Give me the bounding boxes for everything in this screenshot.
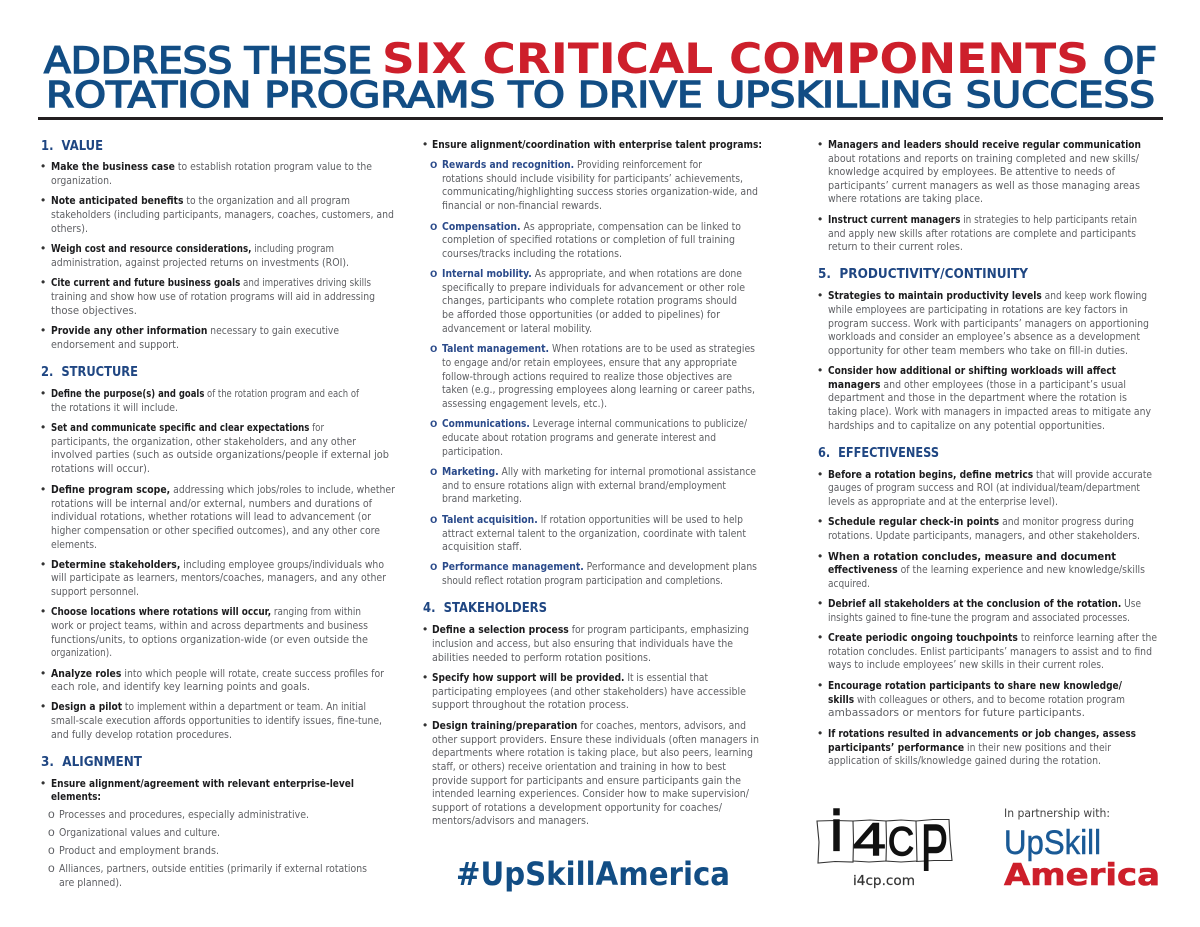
heading: effectiveness: 6. EFFECTIVENESS (818, 445, 939, 461)
item: managers and leaders: Managers and leaders should receive regular communication (828, 138, 1141, 151)
item: marketing: o (430, 464, 437, 478)
logo: i4cp (817, 799, 952, 889)
hashtag: #UpSkillAmerica (456, 855, 730, 893)
item: program scope: • (41, 482, 45, 496)
icon: sketched letter boxes (817, 820, 952, 863)
item: check-in points: Schedule regular check-in points and monitor progress during (828, 515, 1134, 528)
item: business case: organization. (51, 174, 112, 187)
item: values: Organizational values and culture. (59, 826, 220, 839)
item: support: participating employees (and other stakeholders) have accessible (432, 685, 746, 698)
item: marketing: and to ensure rotations align with external brand/employment (442, 479, 726, 492)
item: training: other support providers. Ensure these individuals (often managers in (432, 733, 759, 746)
item: talent management: assessing engagement levels, etc.). (442, 397, 607, 410)
item: business goals: Cite current and future business goals and imperatives driving skills (51, 276, 371, 289)
item: business goals: training and show how use of rotation programs will aid in addressing (51, 290, 375, 303)
item: internal mobility: Internal mobility. As appropriate, and when rotations are done (442, 267, 742, 280)
item: debrief: insights gained to fine-tune the program and associated processes. (828, 611, 1130, 624)
item: training (423, 718, 759, 827)
item: anticipated benefits: Note anticipated benefits to the organization and all program (51, 194, 350, 207)
item: advancement (818, 726, 1136, 767)
item: internal mobility: advancement or lateral mobility. (442, 322, 592, 335)
panel: 2. structure (41, 364, 395, 741)
item: marketing (430, 464, 756, 505)
item: talent management: follow-through actions required to realize those objectives are (442, 370, 732, 383)
item: communications: Communications. Leverage internal communications to publicize/ (442, 417, 747, 430)
item: business goals (41, 275, 375, 317)
item: talent acquisition: Talent acquisition. If rotation opportunities will be used to help (442, 513, 743, 526)
item: talent acquisition: o (430, 512, 437, 526)
item: define metrics: Before a rotation begins, define metrics that will provide accurate (828, 468, 1152, 481)
item: brands: Product and employment brands. (59, 844, 219, 857)
item: managers and leaders: participants’ current managers as well as those managing areas (828, 179, 1140, 192)
item: selection process: inclusion and access, but also ensuring that individuals have the (432, 637, 733, 650)
panel: 3. alignment (41, 137, 762, 889)
panel: 5. productivity/continuity (818, 266, 1152, 432)
item: share knowledge: skills with colleagues or others, and to become rotation program (828, 693, 1125, 706)
panel: 4. stakeholders (423, 137, 1141, 827)
title: ADDRESS THESE (44, 39, 372, 82)
item: talent acquisition: attract external talent to the organization, coordinate with talent (442, 527, 746, 540)
item: other information: endorsement and support. (51, 338, 179, 351)
item: talent programs: Ensure alignment/coordination with enterprise talent programs: (432, 138, 762, 151)
item: touchpoints: • (818, 630, 822, 644)
item: business case: Make the business case to establish rotation program value to the (51, 160, 372, 173)
item: enterprise-level elements: Ensure alignment/agreement with relevant enterprise-level (51, 777, 354, 790)
item: talent acquisition: acquisition staff. (442, 540, 522, 553)
item: analyze roles: each role, and identify key learning points and goals. (51, 680, 310, 693)
item: rewards: Rewards and recognition. Providing reinforcement for (442, 158, 702, 171)
item: training: intended learning experiences. Consider how to make supervision/ (432, 787, 749, 800)
item: locations: functions/units, to options organization-wide (or even outside the (51, 633, 368, 646)
item: internal mobility: changes, participants who complete rotation programs should (442, 294, 737, 307)
item: locations: organization). (51, 646, 112, 659)
item: purpose and goals: Define the purpose(s) and goals of the rotation program and each of (51, 387, 359, 400)
item: compensation: Compensation. As appropriate, compensation can be linked to (442, 220, 741, 233)
item: anticipated benefits: • (41, 193, 45, 207)
item: stakeholders (41, 557, 386, 598)
item: brands: o (48, 843, 55, 857)
item: instruct managers: return to their current roles. (828, 240, 963, 253)
item: expectations (41, 420, 389, 475)
item: productivity levels: Strategies to maintain productivity levels and keep work flowing (828, 289, 1147, 302)
item: define metrics: • (818, 467, 822, 481)
item: managers and leaders: where rotations are taking place. (828, 192, 983, 205)
item: talent management: Talent management. When rotations are to be used as strategies (442, 342, 755, 355)
item: talent programs: • (423, 137, 427, 151)
item: pilot: and fully develop rotation procedures. (51, 728, 232, 741)
item: stakeholders: support personnel. (51, 585, 139, 598)
item: program scope: individual rotations, whether rotations will lead to advancement (or (51, 510, 371, 523)
item: check-in points: rotations. Update participants, managers, and other stakeholders. (828, 529, 1140, 542)
item: locations (41, 604, 368, 659)
item: check-in points: • (818, 514, 822, 528)
item: support (423, 670, 746, 711)
item: internal mobility: o (430, 266, 437, 280)
item: purpose and goals: the rotations it will include. (51, 401, 178, 414)
item: measure effectiveness: • (818, 549, 822, 563)
item: alliances: o (48, 861, 55, 875)
item: program scope: rotations will be internal and/or external, numbers and durations of (51, 497, 372, 510)
item: shifting workloads: • (818, 363, 822, 377)
item: rewards: o (430, 157, 437, 171)
item: values: o (48, 825, 55, 839)
item: selection process: • (423, 622, 427, 636)
item: communications: o (430, 416, 437, 430)
item: other information: Provide any other information necessary to gain executive (51, 324, 339, 337)
item: alliances: Alliances, partners, outside entities (primarily if external rotations (59, 862, 367, 875)
item: program scope: Define program scope, addressing which jobs/roles to include, whether (51, 483, 395, 496)
item: productivity levels: • (818, 288, 822, 302)
item: selection process: Define a selection process for program participants, emphasizing (432, 623, 749, 636)
logo: i4cp: P (921, 810, 948, 884)
item: analyze roles: • (41, 666, 45, 680)
item: enterprise-level elements (41, 776, 354, 803)
item: define metrics (818, 467, 1152, 508)
item: training: Design training/preparation for coaches, mentors, advisors, and (432, 719, 746, 732)
item: locations: Choose locations where rotations will occur, ranging from within (51, 605, 361, 618)
item: cost considerations: Weigh cost and resource considerations, including program (51, 242, 334, 255)
item: compensation: completion of specified rotations or completion of full training (442, 233, 735, 246)
item: talent management (430, 341, 755, 410)
item: expectations: involved parties (such as outside organizations/people if external job (51, 448, 389, 461)
item: share knowledge (818, 678, 1125, 719)
item: selection process (423, 622, 749, 664)
url: i4cp.com (853, 873, 915, 889)
item: communications (430, 416, 747, 458)
item: instruct managers (818, 212, 1137, 253)
logo: i4cp: 4 (853, 813, 886, 865)
item: training: • (423, 718, 427, 732)
item: performance management: Performance management. Performance and development plans (442, 560, 757, 573)
item: compensation: o (430, 219, 437, 233)
item: managers and leaders (818, 137, 1141, 205)
item: stakeholders: Determine stakeholders, including employee groups/individuals who (51, 558, 384, 571)
item: measure effectiveness: effectiveness of the learning experience and new knowledge/skills (828, 563, 1145, 576)
item: support: Specify how support will be provided. It is essential that (432, 671, 708, 684)
item: anticipated benefits (41, 193, 394, 235)
item: processes: Processes and procedures, especially administrative. (59, 808, 309, 821)
item: training: mentors/advisors and managers. (432, 814, 589, 827)
item: advancement: application of skills/knowledge gained during the rotation. (828, 754, 1101, 767)
item: marketing: Marketing. Ally with marketing for internal promotional assistance (442, 465, 756, 478)
item: alliances: are planned). (59, 876, 122, 889)
logo: upskill america (1004, 806, 1160, 893)
item: training: staff, or others) receive orientation and training in how to best (432, 760, 726, 773)
item: shifting workloads: managers and other employees (those in a participant’s usual (828, 378, 1126, 391)
item: advancement: If rotations resulted in advancements or job changes, assess (828, 727, 1136, 740)
item: training: support of rotations a development opportunity for coaches/ (432, 801, 722, 814)
heading: alignment: 3. ALIGNMENT (41, 754, 143, 770)
item: define metrics: levels as appropriate and at the enterprise level). (828, 495, 1058, 508)
item: measure effectiveness: When a rotation concludes, measure and document (828, 550, 1116, 563)
item: expectations: rotations will occur). (51, 462, 150, 475)
item: advancement: participants’ performance in their new positions and their (828, 741, 1111, 754)
logo: i4cp: i (831, 799, 842, 862)
item: measure effectiveness: acquired. (828, 577, 870, 590)
item: managers and leaders: knowledge acquired by employees. Be attentive to needs of (828, 165, 1115, 178)
item: compensation (430, 219, 741, 260)
item: analyze roles: Analyze roles into which people will rotate, create success profiles for (51, 667, 384, 680)
item: check-in points (818, 514, 1140, 542)
item: enterprise-level elements: • (41, 776, 45, 790)
item: enterprise-level elements: elements: (51, 790, 101, 803)
item: productivity levels (818, 288, 1149, 357)
item: other information (41, 323, 339, 351)
item: performance management (430, 559, 757, 587)
panel: 1. value (41, 138, 394, 351)
item: talent management: o (430, 341, 437, 355)
item: managers and leaders: • (818, 137, 822, 151)
item: pilot (41, 699, 382, 741)
item: performance management: o (430, 559, 437, 573)
item: instruct managers: • (818, 212, 822, 226)
item: locations: work or project teams, within and across departments and business (51, 619, 368, 632)
item: debrief: Debrief all stakeholders at the conclusion of the rotation. Use (828, 597, 1141, 610)
item: instruct managers: and apply new skills after rotations are complete and participants (828, 227, 1136, 240)
item: marketing: brand marketing. (442, 492, 522, 505)
item: productivity levels: while employees are participating in rotations are key factors in (828, 303, 1128, 316)
logo: i4cp: C (888, 820, 914, 864)
title: ROTATION PROGRAMS TO DRIVE UPSKILLING SUCCESS (46, 75, 1155, 116)
item: touchpoints: Create periodic ongoing touchpoints to reinforce learning after the (828, 631, 1157, 644)
item: program scope: higher compensation or other specified outcomes), and any other core (51, 524, 380, 537)
item: pilot: Design a pilot to implement within a department or team. An initial (51, 700, 366, 713)
item: support: support throughout the rotation process. (432, 698, 629, 711)
heading: value: 1. VALUE (41, 138, 103, 154)
item: shifting workloads (818, 363, 1152, 432)
item: cost considerations: • (41, 241, 45, 255)
item: advancement: • (818, 726, 822, 740)
item: shifting workloads: hardships and to capitalize on any potential opportunities. (828, 419, 1105, 432)
item: expectations: • (41, 420, 45, 434)
item: communications: participation. (442, 445, 503, 458)
item: talent acquisition (430, 512, 746, 553)
item: business case: • (41, 159, 45, 173)
item: productivity levels: program success. Work with participants’ managers on apportioning (828, 317, 1149, 330)
item: communications: educate about rotation programs and generate interest and (442, 431, 716, 444)
item: define metrics: gauges of program success and ROI (at individual/team/department (828, 481, 1140, 494)
item: measure effectiveness (818, 549, 1145, 590)
heading: productivity/continuity: 5. PRODUCTIVITY/CONTINUITY (818, 266, 1028, 282)
title (44, 34, 1157, 116)
item: expectations: participants, the organization, other stakeholders, and any other (51, 435, 356, 448)
item: rewards: communicating/highlighting success stories organization-wide, and (442, 185, 758, 198)
item: internal mobility: specifically to prepare individuals for advancement or other role (442, 281, 745, 294)
item: shifting workloads: taking place). Work with managers in impacted areas to mitigate any (828, 405, 1152, 418)
partnership label: In partnership with: (1004, 806, 1110, 820)
item: debrief: • (818, 596, 822, 610)
item: rewards: rotations should include visibility for participants’ achievements, (442, 172, 743, 185)
item: share knowledge: ambassadors or mentors for future participants. (828, 706, 1085, 719)
panel: 6. effectiveness (818, 445, 1157, 767)
item: pilot: • (41, 699, 45, 713)
item: training: provide support for participants and ensure participants gain the (432, 774, 741, 787)
item: business goals: • (41, 275, 45, 289)
item: compensation: courses/tracks including the rotations. (442, 247, 622, 260)
item: program scope (41, 482, 395, 551)
item: selection process: abilities needed to perform rotation positions. (432, 651, 651, 664)
item: performance management: should reflect rotation program participation and completions. (442, 574, 723, 587)
item: rewards: financial or non-financial rewards. (442, 199, 602, 212)
item: anticipated benefits: stakeholders (including participants, managers, coaches, customers, and (51, 208, 394, 221)
item: shifting workloads: department and those in the department where the rotation is (828, 391, 1127, 404)
item: talent management: to engage and/or retain employees, ensure that any appropriate (442, 356, 737, 369)
item: shifting workloads: Consider how additional or shifting workloads will affect (828, 364, 1116, 377)
item: expectations: Set and communicate specific and clear expectations for (51, 421, 324, 434)
item: touchpoints: ways to include employees’ new skills in their current roles. (828, 658, 1104, 671)
item: cost considerations (41, 241, 349, 269)
item: purpose and goals: • (41, 386, 45, 400)
item: alliances (48, 861, 367, 889)
america wordmark: America (1004, 858, 1160, 893)
item: productivity levels: opportunity for other team members who take on fill-in duties. (828, 344, 1128, 357)
item: rewards (430, 157, 758, 212)
item: share knowledge: • (818, 678, 822, 692)
item: internal mobility: be afforded those opportunities (or added to pipelines) for (442, 308, 720, 321)
item: stakeholders: • (41, 557, 45, 571)
item: productivity levels: workloads and consider an employee’s absence as a development (828, 330, 1140, 343)
item: analyze roles (41, 666, 384, 693)
item: purpose and goals (41, 386, 359, 414)
item: training: departments where rotation is taking place, but also peers, learning (432, 746, 753, 759)
item: other information: • (41, 323, 45, 337)
item: pilot: small-scale execution affords opportunities to identify issues, fine-tune, (51, 714, 382, 727)
item: touchpoints: rotation concludes. Enlist participants’ managers to assist and to find (828, 645, 1152, 658)
item: share knowledge: Encourage rotation participants to share new knowledge/ (828, 679, 1122, 692)
item: anticipated benefits: others). (51, 222, 88, 235)
upskill wordmark: UpSkill (1004, 824, 1101, 862)
item: instruct managers: Instruct current managers in strategies to help participants retain (828, 213, 1137, 226)
item: debrief (818, 596, 1141, 624)
item: business case (41, 159, 372, 187)
title: SIX CRITICAL COMPONENTS (382, 34, 1089, 83)
item: program scope: elements. (51, 538, 97, 551)
item: managers and leaders: about rotations and reports on training completed and new skills/ (828, 152, 1139, 165)
heading: structure: 2. STRUCTURE (41, 364, 138, 380)
item: cost considerations: administration, against projected returns on investments (ROI). (51, 256, 349, 269)
title: OF (1103, 39, 1157, 82)
item: internal mobility (430, 266, 745, 335)
item: locations: • (41, 604, 45, 618)
item: talent management: taken (e.g., progressing employees along learning or career paths, (442, 383, 755, 396)
item: support: • (423, 670, 427, 684)
heading: stakeholders: 4. STAKEHOLDERS (423, 600, 547, 616)
item: business goals: those objectives. (51, 304, 137, 317)
item: touchpoints (818, 630, 1157, 671)
item: stakeholders: will participate as learners, mentors/coaches, managers, and any other (51, 571, 386, 584)
item: processes: o (48, 807, 55, 821)
